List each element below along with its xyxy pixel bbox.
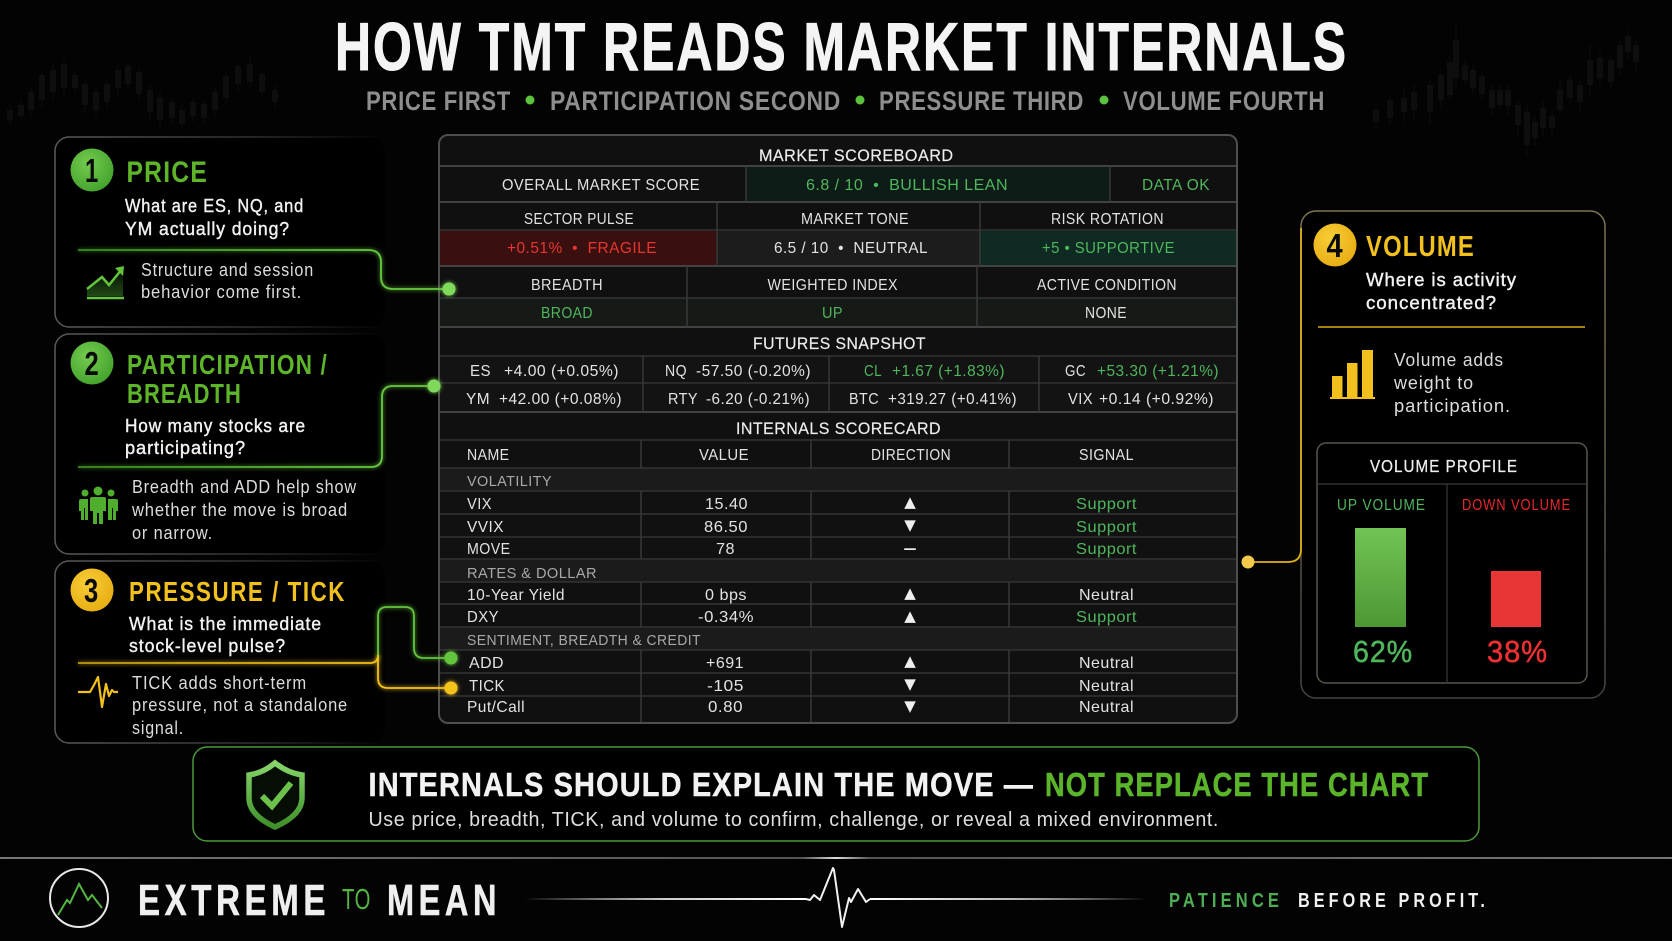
icon: people [79,486,118,524]
subtitle: VOLUME FOURTH [1123,86,1325,116]
sentiment, breadth and credit section: Neutral [1079,655,1134,672]
panel: 2 participation / breadth [55,334,385,554]
icon: number 4 badge: 4 [1326,227,1344,264]
chart heading: VOLUME PROFILE [1370,456,1518,476]
description text: participation. [1394,396,1511,416]
sentiment, breadth and credit section [467,632,1134,716]
callout heading: INTERNALS SHOULD EXPLAIN THE MOVE — [368,767,1034,804]
sector pulse, market tone, risk rotation row: +0.51% • FRAGILE [507,240,657,257]
callout heading: NOT REPLACE THE CHART [1045,767,1429,804]
brand name: MEAN [387,876,501,925]
heading: participation / breadth: PARTICIPATION / [127,349,328,380]
sector pulse, market tone, risk rotation row: 6.5 / 10 • NEUTRAL [774,240,928,257]
volatility section [467,473,1137,558]
description text: behavior come first. [141,282,302,302]
arrow: volume connector [1242,228,1301,568]
footer [50,868,1489,927]
futures snapshot: NQ [665,363,687,380]
sentiment, breadth and credit section: +691 [706,655,744,672]
futures snapshot: -6.20 (-0.21%) [706,391,810,408]
icon: rising chart [87,266,124,298]
breadth, weighted index, active condition row: WEIGHTED INDEX [768,277,898,294]
heading: participation / breadth [127,349,328,409]
rates and dollar section: ▲ [904,607,916,625]
sector pulse, market tone, risk rotation row: RISK ROTATION [1051,211,1164,228]
futures snapshot: VIX [1068,391,1093,408]
callout text: Use price, breadth, TICK, and volume to confirm, challenge, or reveal a mixed environment. [368,809,1219,831]
up volume bar: UP VOLUME [1337,497,1426,514]
breadth, weighted index, active condition row: NONE [1085,305,1127,322]
description text: or narrow. [132,523,213,543]
description text: weight to [1393,373,1474,393]
overall market score row [502,177,1210,194]
icon: number 3 badge: 3 [84,572,99,609]
icon: logo mountain [50,869,108,927]
volatility section: VIX [467,496,492,513]
arrow: price connector [78,250,456,296]
scorecard column headers: NAME [467,447,510,464]
sentiment, breadth and credit section: SENTIMENT, BREADTH & CREDIT [467,632,701,649]
volatility section: 15.40 [705,496,748,513]
icon: number 2 badge: 2 [84,345,100,382]
sentiment, breadth and credit section: ▲ [904,652,916,670]
scorecard column headers: DIRECTION [871,447,951,464]
question text [125,195,304,239]
brand name: TO [342,884,371,916]
background candles left [10,58,275,130]
down volume bar: DOWN VOLUME [1462,497,1571,514]
sector pulse, market tone, risk rotation row: SECTOR PULSE [524,211,634,228]
volatility section: Support [1076,541,1137,558]
description text: TICK adds short-term [132,673,307,693]
heading: volume: VOLUME [1366,231,1475,263]
overall market score row: 6.8 / 10 • BULLISH LEAN [806,177,1008,194]
futures snapshot: -57.50 (-0.20%) [696,363,811,380]
arrow: add connector [378,607,458,664]
up volume bar [1337,497,1426,669]
futures snapshot: YM [466,391,490,408]
overall market score row: OVERALL MARKET SCORE [502,177,700,194]
rates and dollar section: Neutral [1079,587,1134,604]
sentiment, breadth and credit section: Put/Call [467,699,525,716]
sentiment, breadth and credit section: Neutral [1079,678,1134,695]
sentiment, breadth and credit section: ADD [469,655,504,672]
question text [1366,269,1517,313]
icon: bar chart [1330,350,1375,399]
futures snapshot: +4.00 (+0.05%) [504,363,619,380]
question text: YM actually doing? [125,218,290,239]
scorecard column headers: VALUE [699,447,749,464]
volatility section: Support [1076,496,1137,513]
scorecard column headers: SIGNAL [1079,447,1134,464]
question text: What are ES, NQ, and [125,195,304,216]
volatility section: 78 [716,541,735,558]
description text: pressure, not a standalone [132,695,348,715]
rates and dollar section: ▲ [904,584,916,602]
tagline: PATIENCE [1169,890,1283,912]
icon: number 1 badge: 1 [85,152,99,189]
rates and dollar section: Support [1076,609,1137,626]
heading: participation / breadth: BREADTH [127,378,242,409]
sentiment, breadth and credit section: ▼ [904,697,916,715]
volatility section: — [904,542,916,557]
breadth, weighted index, active condition row: BREADTH [531,277,603,294]
futures snapshot: +42.00 (+0.08%) [499,391,622,408]
icon: number 3 badge [70,568,114,612]
description text: whether the move is broad [131,500,348,520]
question text [129,613,322,656]
sentiment, breadth and credit section: Neutral [1079,699,1134,716]
futures snapshot: +319.27 (+0.41%) [888,391,1017,408]
futures snapshot: +53.30 (+1.21%) [1097,363,1219,380]
icon: number 1 badge [70,148,114,192]
sector pulse, market tone, risk rotation row: MARKET TONE [801,211,909,228]
internals scorecard heading: INTERNALS SCORECARD [736,419,941,438]
question text [125,415,306,458]
volatility section: MOVE [467,541,510,558]
rates and dollar section: -0.34% [698,609,754,626]
question text: participating? [125,437,246,458]
scoreboard heading: MARKET SCOREBOARD [759,146,954,165]
sentiment, breadth and credit section: -105 [707,678,744,695]
sentiment, breadth and credit section: 0.80 [708,699,743,716]
volatility section: ▲ [904,493,916,511]
futures snapshot: FUTURES SNAPSHOT [753,334,926,353]
down volume bar [1462,497,1571,669]
subtitle [366,86,1325,116]
volatility section: 86.50 [704,519,748,536]
arrow: tick connector [78,655,458,694]
breadth, weighted index, active condition row [531,277,1177,322]
futures snapshot: BTC [849,391,879,408]
footer rule [0,857,1672,859]
breadth, weighted index, active condition row: BROAD [541,305,593,322]
description text [132,673,348,738]
down volume bar: 38% [1487,634,1548,669]
breadth, weighted index, active condition row: ACTIVE CONDITION [1037,277,1177,294]
futures snapshot: GC [1065,363,1086,380]
icon: shield check [249,763,302,827]
icon: number 2 badge [70,342,114,384]
rates and dollar section [467,565,1137,626]
volatility section: ▼ [904,516,916,534]
description text: Breadth and ADD help show [132,477,357,497]
futures snapshot: CL [864,363,882,380]
sentiment, breadth and credit section: ▼ [904,675,916,693]
subtitle: PRESSURE THIRD [879,86,1084,116]
question text: stock-level pulse? [129,635,286,656]
scorecard column headers [467,447,1134,464]
description text: Structure and session [141,260,314,280]
heading: pressure / tick: PRESSURE / TICK [129,576,346,607]
question text: concentrated? [1366,292,1497,313]
futures snapshot: +1.67 (+1.83%) [892,363,1005,380]
futures snapshot [466,334,1219,408]
volatility section: VOLATILITY [467,473,552,490]
futures snapshot: ES [470,363,491,380]
description text [1393,350,1511,416]
volatility section: VVIX [467,519,504,536]
rates and dollar section: 10-Year Yield [467,587,565,604]
up volume bar: 62% [1353,634,1413,669]
subtitle: PARTICIPATION SECOND [550,86,841,116]
tagline [1169,890,1489,912]
callout [193,747,1479,841]
description text: signal. [132,718,184,738]
icon: heartbeat line [524,868,1147,927]
panel: 3 pressure / tick [55,561,385,743]
panel: 1 price [55,137,385,327]
rates and dollar section: DXY [467,609,499,626]
icon: number 4 badge [1314,224,1356,266]
tagline: BEFORE PROFIT. [1298,890,1489,912]
arrow: participation connector [78,380,440,467]
volatility section: Support [1076,519,1137,536]
futures snapshot: RTY [668,391,698,408]
description text [131,477,357,543]
overall market score row: DATA OK [1142,177,1210,194]
question text: How many stocks are [125,415,306,436]
divider [1318,326,1585,328]
icon: tick pulse [78,677,118,707]
panel: market scoreboard table [439,135,1237,723]
sector pulse, market tone, risk rotation row [507,211,1175,257]
rates and dollar section: RATES & DOLLAR [467,565,597,582]
sector pulse, market tone, risk rotation row: +5 • SUPPORTIVE [1042,240,1175,257]
brand name: EXTREME [138,876,330,925]
futures snapshot: +0.14 (+0.92%) [1099,391,1214,408]
question text: What is the immediate [129,613,322,634]
subtitle: PRICE FIRST [366,86,511,116]
sentiment, breadth and credit section: TICK [469,678,505,695]
chart: volume profile [1317,443,1587,683]
background candles right [1376,25,1636,155]
description text: Volume adds [1394,350,1504,370]
description text [141,260,314,302]
heading: price: PRICE [126,156,208,189]
rates and dollar section: 0 bps [705,587,747,604]
question text: Where is activity [1366,269,1517,290]
breadth, weighted index, active condition row: UP [822,305,843,322]
panel: 4 volume [1301,211,1605,698]
